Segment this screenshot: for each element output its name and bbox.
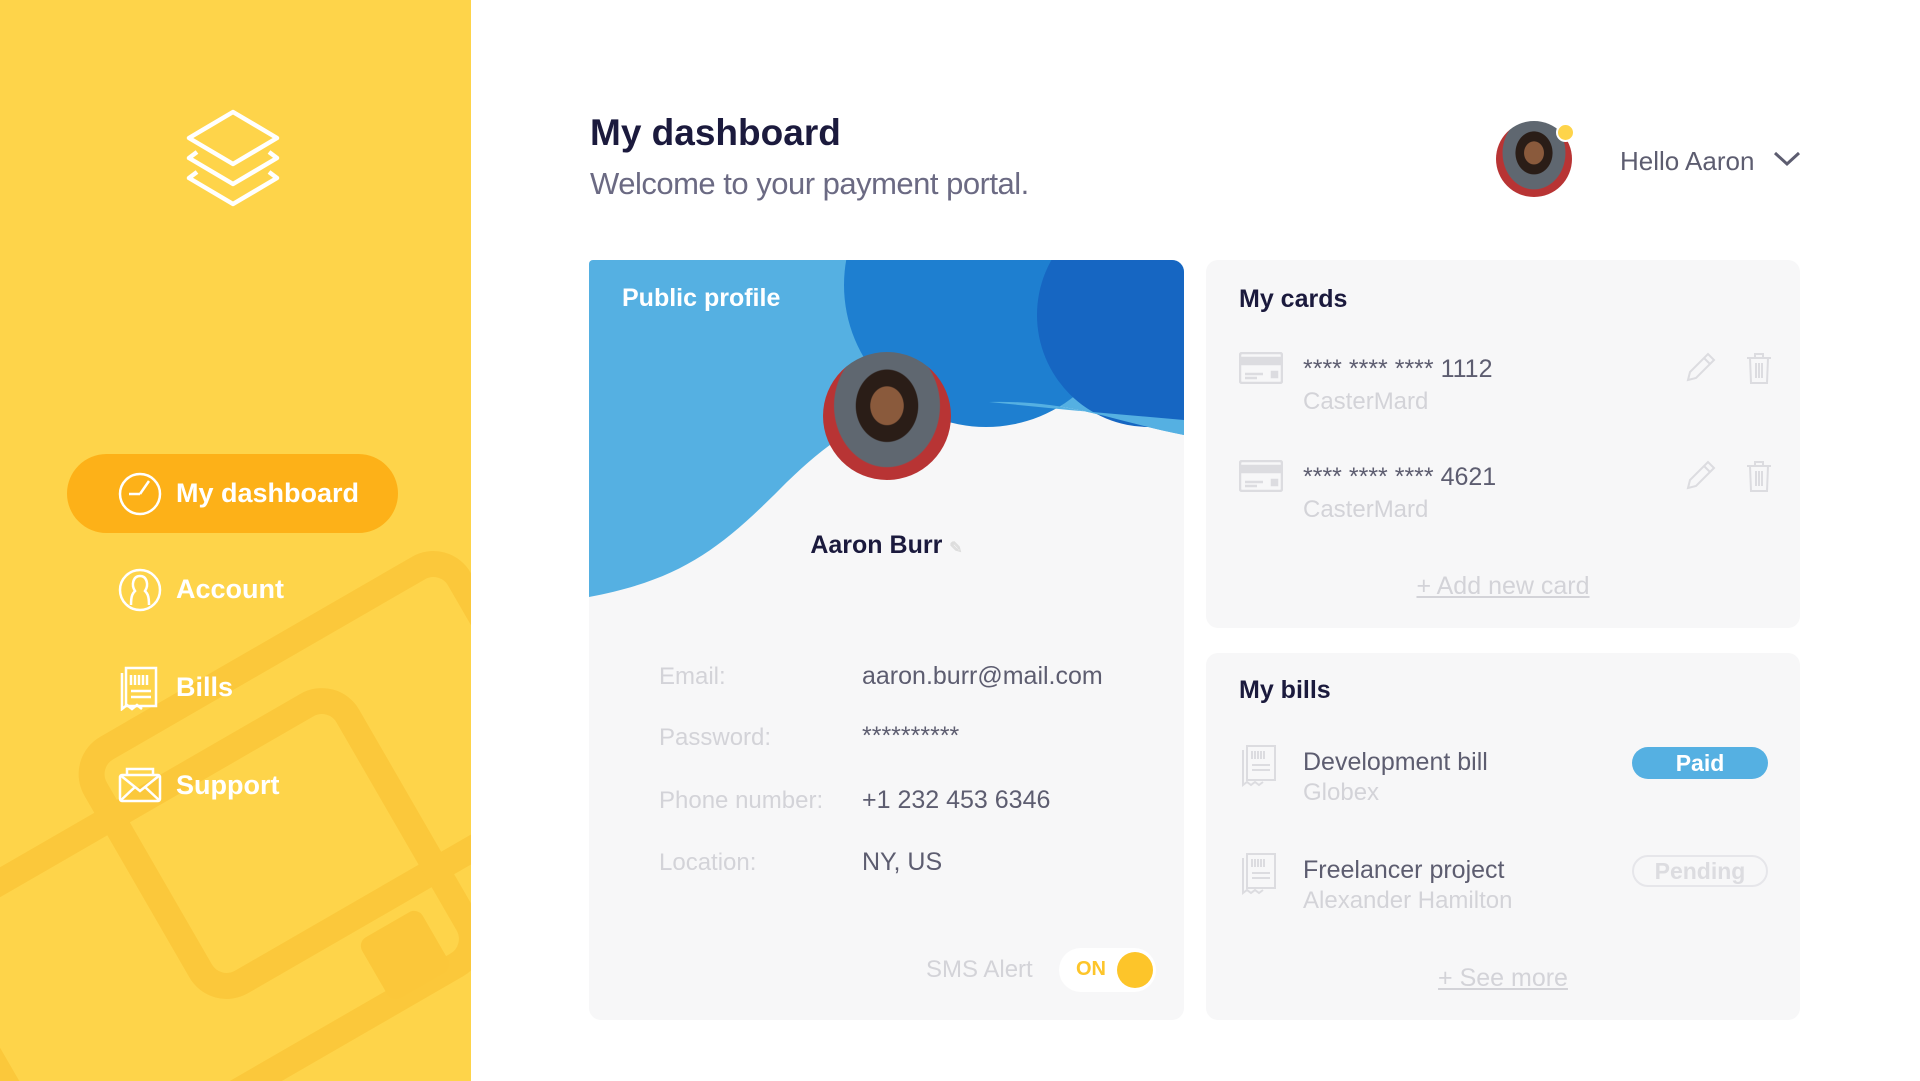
card row 2: CasterMard (1303, 496, 1428, 523)
subtitle: Welcome to your payment portal. (590, 166, 1029, 201)
nav: Account: Account (176, 574, 284, 604)
panel: public profile (589, 260, 1184, 1020)
fields: Phone number: (659, 787, 823, 814)
panel: my bills: My bills (1239, 676, 1331, 704)
name: Aaron Burr ✎ (810, 531, 963, 559)
nav: Support: Support (176, 770, 279, 800)
profile photo (823, 352, 951, 480)
pending badge: Pending (1655, 858, 1745, 884)
panel: my cards (1206, 260, 1800, 628)
fields: aaron.burr@mail.com (862, 662, 1103, 690)
fields: +1 232 453 6346 (862, 786, 1050, 814)
fields: ********** (862, 722, 959, 750)
panel: my bills (1206, 653, 1800, 1020)
SMS alert toggle (926, 952, 1153, 988)
bill row 2 (1242, 853, 1768, 914)
fields: Password: (659, 724, 771, 751)
bill row 1 (1242, 745, 1768, 806)
nav: Support (118, 768, 280, 802)
chevron (1774, 152, 1800, 166)
card row 1: CasterMard (1303, 388, 1428, 415)
nav: Bills: Bills (176, 672, 233, 702)
sidebar (0, 0, 471, 1081)
nav: Bills (120, 666, 233, 711)
card row 1: **** **** **** 1112 (1303, 355, 1492, 383)
fields (659, 662, 1103, 876)
header title: My dashboard (590, 112, 841, 153)
fields: NY, US (862, 848, 942, 876)
paid badge (1632, 747, 1768, 779)
bill row 2: Alexander Hamilton (1303, 887, 1512, 914)
user avatar (1496, 121, 1573, 197)
bill row 1: Globex (1303, 779, 1379, 806)
heading: Public profile (622, 284, 780, 312)
panel: my cards: My cards (1239, 285, 1347, 313)
fields: Email: (659, 663, 726, 690)
card row 2 (1239, 460, 1771, 523)
greeting: Hello Aaron (1620, 146, 1754, 176)
nav: Account (118, 568, 284, 612)
SMS alert toggle: SMS Alert (926, 956, 1033, 983)
decorative card shapes (0, 551, 471, 1081)
card row 2: **** **** **** 4621 (1303, 463, 1496, 491)
paid badge: Paid (1676, 750, 1724, 776)
bill row 1: Development bill (1303, 748, 1488, 776)
logo icon (186, 110, 280, 206)
card row 1 (1239, 352, 1771, 415)
bill row 2: Freelancer project (1303, 856, 1504, 884)
nav: My dashboard (active) (67, 454, 398, 533)
pending badge (1632, 855, 1768, 887)
SMS alert toggle: ON (1076, 958, 1106, 980)
nav: My dashboard (active): My dashboard (176, 478, 359, 508)
add new card link: + Add new card (1416, 572, 1590, 600)
fields: Location: (659, 849, 756, 876)
status dot (1556, 123, 1575, 142)
blue header shapes (589, 260, 1184, 597)
see more link: + See more (1438, 964, 1568, 992)
